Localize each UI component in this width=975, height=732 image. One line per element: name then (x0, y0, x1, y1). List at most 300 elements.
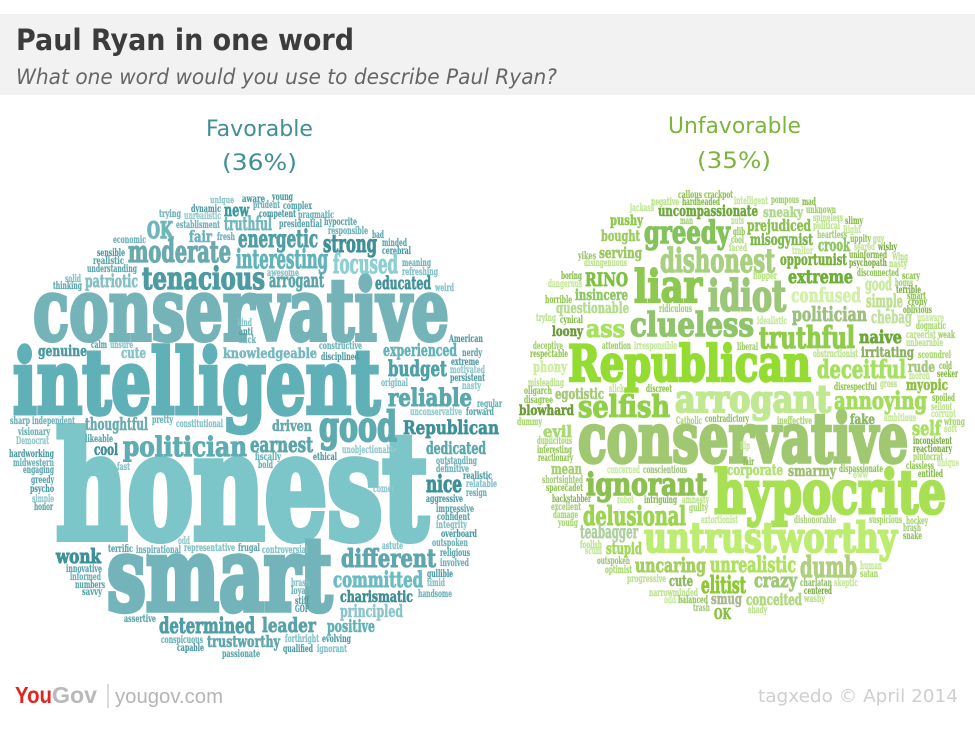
word cloud: favorable: integrity (436, 520, 468, 531)
word cloud: favorable: confident (437, 512, 470, 523)
word cloud: unfavorable: dumb (800, 550, 857, 584)
word cloud: unfavorable: pushy (610, 213, 644, 229)
word cloud: favorable: comer (373, 484, 395, 495)
word cloud: unfavorable: ambitious (884, 413, 916, 424)
word cloud: unfavorable: young (557, 518, 578, 529)
word cloud: unfavorable: scary (902, 271, 921, 282)
word cloud: unfavorable: moron (909, 371, 930, 382)
word cloud: favorable: gullible (427, 569, 453, 580)
heading: favorable (206, 117, 313, 176)
word cloud: unfavorable: trash (693, 603, 710, 614)
word cloud: favorable: unrealistic (184, 211, 221, 222)
word cloud: unfavorable: politician (792, 302, 867, 326)
word cloud: unfavorable: callous (678, 190, 702, 201)
word cloud: unfavorable: plutocrat (913, 452, 943, 463)
word cloud: unfavorable: classless (906, 461, 934, 472)
word: liar: liar (634, 260, 703, 313)
word cloud: favorable: engaging (23, 465, 54, 476)
word cloud: unfavorable: bought (601, 227, 640, 245)
word cloud: unfavorable: prejudiced (747, 216, 811, 235)
word cloud: favorable: outstanding (436, 456, 477, 467)
word cloud: favorable: complex (283, 201, 313, 212)
word cloud: favorable: moderate (128, 235, 231, 270)
word cloud: unfavorable: guy (873, 234, 885, 245)
word cloud: unfavorable: unknown (806, 205, 836, 216)
word cloud: favorable: definitive (436, 464, 469, 475)
word cloud: unfavorable: backstabber (552, 494, 591, 505)
word cloud: unfavorable: confused (791, 283, 861, 307)
logo: YouGov: Gov (52, 682, 97, 708)
word cloud: favorable: anti (239, 327, 253, 338)
word cloud: unfavorable: good (865, 274, 892, 295)
word: idiot: idiot (708, 272, 786, 322)
word cloud: favorable: positive (327, 617, 375, 637)
word cloud: favorable: aware (242, 194, 265, 205)
word cloud: favorable: pragmatic (298, 210, 334, 221)
word cloud: unfavorable: insincere (575, 286, 628, 304)
word cloud: unfavorable: opportunist (780, 250, 847, 269)
word cloud: unfavorable: conscientious (643, 465, 687, 476)
word cloud: favorable: competent (259, 209, 296, 220)
word cloud: favorable: presidential (279, 219, 322, 230)
word cloud: unfavorable: duplicitous (537, 436, 572, 447)
word cloud: unfavorable: progressive (627, 574, 666, 585)
word cloud: favorable: sensible (97, 248, 125, 259)
word cloud: unfavorable: myopic (906, 376, 948, 394)
word cloud: unfavorable: crazy (754, 568, 798, 592)
word cloud: unfavorable: mad (802, 197, 816, 208)
word cloud: favorable: bad (372, 230, 384, 241)
word cloud: unfavorable: liberal (737, 342, 758, 353)
word cloud: unfavorable: annoying (834, 386, 927, 415)
word cloud: favorable: representative (184, 543, 235, 554)
word cloud: favorable: charismatic (340, 587, 413, 606)
word cloud: favorable: fair (189, 227, 212, 246)
word cloud: unfavorable: hardheaded (682, 197, 720, 208)
word cloud: unfavorable: disrespectful (834, 382, 877, 393)
word cloud: favorable: terrific (108, 544, 133, 555)
word cloud: favorable: savvy (82, 587, 103, 598)
word cloud: favorable: impressive (436, 504, 474, 515)
word cloud: unfavorable: traitor (792, 246, 813, 257)
word cloud: unfavorable: unique (937, 458, 959, 469)
word cloud: unfavorable: RINO (585, 269, 628, 291)
word cloud: favorable: nice (426, 471, 462, 498)
word cloud: favorable: ethical (313, 452, 337, 463)
title: Paul Ryan in one word (16, 23, 354, 57)
word cloud: unfavorable: intelligent (734, 196, 768, 207)
word: conservative: conservative (33, 261, 449, 361)
word cloud: unfavorable: guilty (689, 503, 709, 514)
word cloud: unfavorable: wishy (877, 242, 898, 253)
word cloud: favorable: aggressive (426, 494, 463, 505)
word cloud: favorable: trustworthy (207, 632, 280, 651)
word cloud: unfavorable: elitist (701, 572, 746, 599)
word cloud: unfavorable: unrealistic (710, 552, 796, 577)
word cloud: unfavorable: human (860, 561, 882, 572)
subtitle: What one word would you use to describe Paul Ryan? (16, 65, 557, 89)
word cloud: favorable: committed (333, 567, 423, 592)
word cloud: unfavorable: smarmy (788, 462, 837, 480)
word cloud: unfavorable: boring (561, 271, 582, 282)
word cloud: unfavorable: contradictory (705, 414, 750, 425)
word cloud: unfavorable: Catholic (676, 416, 702, 427)
word cloud: unfavorable: intriguing (644, 495, 677, 506)
word cloud: favorable: unobjectionable (342, 445, 397, 456)
word cloud: unfavorable: cool (731, 235, 744, 246)
word cloud: unfavorable: discreet (646, 384, 672, 395)
word cloud: favorable: nasty (462, 381, 482, 392)
word cloud: favorable: resign (466, 488, 487, 499)
word cloud: unfavorable: brash (903, 523, 921, 534)
word cloud: favorable: determined (159, 613, 255, 638)
word cloud: unfavorable: seeker (937, 369, 958, 380)
word cloud: unfavorable: balanced (678, 595, 708, 606)
word cloud: favorable: solid (65, 274, 81, 285)
logo: YouGov: You (15, 682, 52, 708)
footer divider (108, 684, 109, 708)
word cloud: favorable: pretty (152, 415, 174, 426)
word cloud: unfavorable: soft (944, 424, 957, 435)
word cloud: unfavorable: dangerous (548, 279, 582, 290)
word cloud: favorable: involved (440, 558, 469, 569)
word: Republican: Republican (568, 334, 811, 393)
word cloud: favorable: hypocrite (324, 217, 357, 228)
word cloud: unfavorable: slimy (845, 216, 864, 227)
word cloud: unfavorable: careerist (906, 330, 936, 341)
word cloud: favorable: forthright (285, 634, 319, 645)
word cloud: favorable: refreshing (402, 267, 438, 278)
word cloud: unfavorable: misogynist (750, 230, 813, 249)
word: smart: smart (107, 515, 332, 634)
word cloud: favorable: midwestern (13, 458, 54, 469)
word cloud: unfavorable: sellout (931, 402, 952, 413)
word cloud: favorable: GOP (295, 604, 309, 615)
word cloud: favorable: constitutional (176, 419, 223, 430)
word cloud: unfavorable: ineffective (777, 416, 812, 427)
word cloud: favorable: energetic (238, 224, 318, 253)
word cloud: favorable: new (224, 200, 249, 221)
word cloud: favorable: relatable (466, 479, 497, 490)
word cloud: unfavorable: terrible (896, 285, 921, 296)
word cloud: favorable: numbers (75, 580, 105, 591)
word cloud: favorable: unique (210, 196, 234, 206)
word cloud: unfavorable: corporate (727, 461, 783, 479)
word cloud: unfavorable: cold (939, 361, 952, 372)
word cloud: unfavorable: washy (803, 594, 826, 605)
word cloud: favorable: unsure (110, 340, 133, 351)
word cloud: favorable: meaning (402, 258, 431, 269)
word cloud: unfavorable: smart (907, 291, 926, 302)
word cloud: favorable: cool (94, 440, 118, 459)
word cloud: favorable: trying (159, 209, 181, 220)
word cloud: unfavorable: scoundrel (918, 350, 951, 361)
word cloud: unfavorable: rude (908, 358, 935, 376)
word cloud: favorable: truthful (224, 213, 272, 235)
word cloud: favorable: inspirational (136, 545, 181, 556)
word cloud: unfavorable: narrowminded (649, 588, 698, 599)
word cloud: favorable: innovative (66, 564, 102, 575)
word cloud: favorable: independent (32, 416, 75, 427)
word cloud: favorable: responsible (328, 226, 368, 237)
word cloud: unfavorable: crook (818, 236, 851, 256)
word cloud: unfavorable: scum (585, 546, 602, 557)
word cloud: unfavorable: sneaky (763, 205, 804, 221)
word cloud: unfavorable: negative (651, 197, 679, 208)
word cloud: favorable: minded (382, 238, 407, 249)
heading: favorable: (36%) (222, 151, 297, 176)
word cloud: unfavorable: naive (859, 327, 902, 348)
word cloud: unfavorable: corrupt (931, 409, 956, 420)
word cloud: favorable: honor (34, 502, 53, 513)
word cloud: unfavorable: dishonorable (794, 515, 836, 526)
word cloud: unfavorable: seared (854, 242, 875, 253)
word cloud: favorable: bold (258, 460, 273, 471)
word cloud: unfavorable: conceited (746, 590, 802, 609)
word cloud: favorable: likeable (85, 434, 113, 445)
word cloud: unfavorable: satan (860, 569, 878, 580)
word: clueless: clueless (630, 305, 754, 344)
word cloud: unfavorable: snake (903, 531, 922, 542)
logo: YouGov (15, 682, 97, 708)
header band (0, 14, 975, 95)
word cloud: favorable: thinking (53, 281, 82, 292)
word cloud: unfavorable: crackpot (704, 190, 733, 201)
word cloud: unfavorable: odd (664, 595, 676, 606)
word cloud: unfavorable: excellent (551, 502, 581, 513)
word cloud: unfavorable: loony (552, 324, 584, 340)
word cloud: favorable: astute (382, 541, 403, 552)
word cloud: favorable: unconservative (410, 407, 462, 418)
word cloud: favorable: disciplined (321, 352, 359, 363)
word cloud: favorable: genuine (38, 342, 87, 360)
word cloud: unfavorable: eww (853, 470, 868, 481)
word cloud: favorable: fiscally (255, 452, 282, 463)
word cloud: unfavorable: heartless (817, 230, 847, 241)
word cloud: favorable: visionary (17, 427, 51, 438)
word cloud: unfavorable: spoiled (932, 393, 955, 404)
word cloud: favorable: greedy (31, 475, 55, 486)
word cloud: unfavorable: outspoken (597, 556, 630, 567)
word cloud: favorable: arrogant (269, 268, 324, 292)
heading: unfavorable: Unfavorable (668, 114, 801, 139)
word cloud: unfavorable: horrible (545, 295, 572, 306)
footer url: yougov.com (115, 686, 223, 708)
word cloud: favorable: extreme (451, 357, 479, 368)
word cloud: unfavorable: unbearable (906, 338, 943, 349)
word cloud: favorable: leader (262, 613, 316, 637)
word cloud: favorable: tenacious (142, 261, 265, 297)
word cloud: unfavorable: robot (617, 495, 634, 506)
word: intelligent: intelligent (13, 329, 380, 434)
word cloud: unfavorable: deceptive (533, 341, 563, 352)
word: arrogant: arrogant (675, 377, 831, 421)
word cloud: favorable: thoughtful (85, 415, 148, 435)
word cloud: favorable: experienced (383, 341, 457, 361)
word cloud: unfavorable: obstructionist (813, 349, 858, 360)
word cloud: favorable: qualified (283, 644, 313, 655)
word cloud: unfavorable: smug (711, 590, 742, 608)
word cloud: favorable: different (341, 544, 436, 573)
word cloud: favorable: driven (272, 417, 312, 435)
word cloud: favorable: realistic (93, 256, 124, 267)
word cloud: favorable: outspoken (432, 538, 468, 549)
word cloud: unfavorable: disconnected (857, 268, 899, 279)
word cloud: unfavorable: shortsighted (542, 475, 583, 486)
heading: favorable: Favorable (206, 117, 313, 142)
word cloud: unfavorable: teabagger (580, 521, 639, 543)
word cloud: unfavorable: damage (553, 510, 578, 521)
word cloud: unfavorable: glib (733, 227, 745, 238)
word cloud: favorable: Republican (403, 417, 499, 439)
word cloud: favorable: frugal (238, 543, 260, 554)
word cloud: unfavorable: charlatan (800, 578, 832, 589)
word cloud: favorable: young (271, 192, 293, 203)
word cloud: unfavorable: shady (748, 605, 768, 616)
word cloud: unfavorable: political (813, 221, 840, 232)
word cloud: favorable: cerebral (382, 246, 411, 257)
word cloud: unfavorable: amnesty (682, 495, 710, 506)
word cloud: unfavorable: fair (743, 457, 754, 468)
word cloud: favorable: understanding (87, 264, 137, 275)
word cloud: unfavorable: dogmatic (916, 321, 946, 332)
word cloud: favorable: sharp (10, 416, 30, 427)
word cloud: unfavorable: spineless (813, 213, 843, 224)
word cloud: unfavorable: dummy (517, 417, 543, 428)
word cloud: unfavorable: flip (740, 441, 750, 452)
word cloud: favorable: nerdy (462, 348, 483, 359)
word cloud: favorable: loyal (291, 586, 308, 597)
word cloud: favorable: original (381, 378, 408, 389)
heading: unfavorable (668, 114, 801, 174)
word cloud: unfavorable: phony (533, 358, 568, 376)
word cloud: favorable: fast (117, 462, 130, 473)
word cloud: unfavorable: centered (804, 586, 832, 597)
word cloud: unfavorable: uncaring (635, 553, 706, 577)
word cloud: unfavorable: man (680, 216, 693, 227)
word cloud: unfavorable: OK (714, 605, 732, 623)
word cloud: unfavorable: Right (843, 225, 861, 236)
word cloud: unfavorable: extortionist (701, 515, 738, 526)
word cloud: unfavorable: questionable (556, 299, 629, 317)
word cloud: favorable: controversial (262, 545, 308, 556)
word cloud: unfavorable: mean (551, 460, 582, 478)
word cloud: favorable: weird (434, 283, 454, 294)
word: good: good (319, 403, 397, 451)
word cloud: unfavorable: respectable (530, 349, 568, 360)
word cloud: unfavorable: foolish (580, 540, 602, 551)
word cloud: favorable: psycho (30, 484, 54, 495)
word cloud: favorable: principled (340, 602, 403, 622)
word cloud: unfavorable: weak (937, 330, 956, 341)
word cloud: unfavorable: stupid (606, 539, 642, 558)
word cloud: unfavorable: ass (586, 314, 625, 343)
word cloud: unfavorable: pompous (771, 195, 799, 206)
word cloud: favorable: simple (32, 494, 54, 505)
word cloud: unfavorable: oligarch (524, 386, 552, 397)
word cloud: favorable: passionate (222, 649, 260, 660)
word cloud: favorable: interesting (236, 245, 328, 275)
word cloud: favorable: dedicated (426, 439, 486, 459)
word cloud: favorable (9, 192, 502, 660)
word cloud: favorable: constructive (319, 341, 362, 352)
word cloud: favorable: wonk (55, 544, 102, 568)
word cloud: unfavorable: psychopath (849, 258, 887, 269)
word cloud: favorable: motivated (450, 365, 485, 376)
word cloud: unfavorable: gross (880, 379, 897, 390)
word cloud: unfavorable: uninformed (849, 250, 887, 261)
word cloud: unfavorable: extreme (788, 266, 853, 288)
word cloud: unfavorable: entitled (918, 469, 943, 480)
word cloud: unfavorable: uppity (850, 234, 872, 245)
word cloud: favorable: focused (333, 250, 398, 280)
word cloud: favorable: regular (477, 399, 502, 410)
word cloud: unfavorable: nasty (889, 259, 908, 270)
word cloud: favorable: odd (178, 536, 190, 547)
word cloud: unfavorable (517, 190, 965, 623)
word cloud: unfavorable: uncompassionate (658, 202, 758, 220)
word cloud: unfavorable: selfish (578, 390, 670, 425)
word cloud: unfavorable: slick (609, 384, 625, 395)
word cloud: unfavorable: yikes (577, 251, 596, 262)
word cloud: favorable: politician (123, 432, 247, 463)
word cloud: unfavorable: hockey (906, 516, 929, 527)
word cloud: favorable: strong (323, 229, 377, 258)
word cloud: unfavorable: ridiculous (659, 304, 692, 315)
word cloud: unfavorable: irresponsible (634, 341, 677, 352)
word cloud: unfavorable: truthful (759, 321, 855, 356)
word cloud: unfavorable: optimist (605, 565, 632, 576)
word cloud: favorable: persistent (450, 373, 485, 384)
word cloud: unfavorable: interesting (537, 445, 572, 456)
word cloud: unfavorable: trying (536, 313, 556, 324)
word cloud: unfavorable: disagree (524, 395, 553, 406)
word cloud: favorable: dynamic (191, 204, 221, 215)
word cloud: favorable: fresh (217, 232, 235, 243)
word cloud: unfavorable: disingenuous (584, 258, 627, 269)
word cloud: unfavorable: flopper (753, 271, 777, 282)
word cloud: unfavorable: greedy (644, 215, 731, 251)
word cloud: favorable: timid (427, 578, 445, 589)
word cloud: favorable: religious (440, 548, 470, 559)
heading: unfavorable: (35%) (697, 149, 771, 174)
word cloud: favorable: reliable (388, 383, 472, 412)
word cloud: favorable: budget (388, 356, 447, 381)
word cloud: favorable: earnest (250, 432, 313, 457)
word: honest: honest (56, 402, 428, 573)
word cloud: favorable: ignorant (317, 644, 347, 655)
word cloud: favorable: stiff (295, 596, 309, 607)
word cloud: unfavorable: chebag (871, 308, 912, 328)
word: untrustworthy: untrustworthy (644, 514, 898, 562)
word cloud: unfavorable: Wing (891, 252, 908, 263)
word cloud: unfavorable: dishonest (660, 241, 775, 280)
word cloud: unfavorable: blowhard (519, 403, 574, 419)
word cloud: favorable: capable (177, 643, 204, 654)
word cloud: unfavorable: reactionary (538, 453, 574, 464)
word cloud: unfavorable: fake (850, 412, 875, 428)
word cloud: unfavorable: delusional (583, 502, 686, 532)
word cloud: favorable: hardworking (9, 449, 54, 460)
word cloud: favorable: knowledgeable (223, 346, 317, 362)
word cloud: unfavorable: serving (599, 244, 642, 262)
word cloud: unfavorable: faced (729, 243, 747, 254)
word cloud: unfavorable: simple (866, 291, 903, 312)
word cloud: unfavorable: egotistic (555, 385, 604, 403)
word cloud: unfavorable: crony (908, 297, 928, 308)
word cloud: favorable: conspicuous (161, 635, 203, 646)
word cloud: favorable: economic (113, 235, 146, 246)
